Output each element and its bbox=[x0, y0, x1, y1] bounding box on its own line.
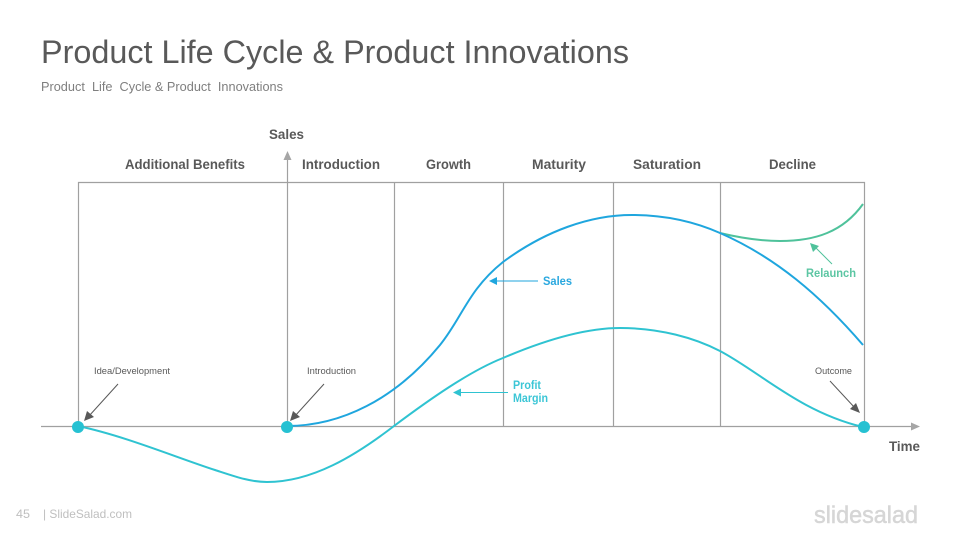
subtitle: Product Life Cycle & Product Innovations bbox=[41, 79, 283, 94]
marker: idea/development bbox=[72, 421, 84, 433]
stage headings: Decline bbox=[769, 156, 816, 172]
callout: outcome bbox=[815, 366, 860, 413]
stage headings: Growth bbox=[426, 156, 471, 172]
sales curve bbox=[287, 215, 863, 426]
label: profit margin: Margin bbox=[513, 391, 548, 405]
callout: introduction: Introduction bbox=[307, 366, 356, 376]
label: relaunch: Relaunch bbox=[806, 266, 856, 280]
stage headings bbox=[125, 156, 816, 172]
stage headings: Saturation bbox=[633, 156, 701, 172]
profit margin curve bbox=[78, 328, 863, 482]
label: profit margin: Profit bbox=[513, 378, 541, 392]
relaunch curve bbox=[720, 204, 863, 241]
callout: idea/development: Idea/Development bbox=[94, 366, 171, 376]
stage headings: Maturity bbox=[532, 156, 586, 172]
footer source: | SlideSalad.com bbox=[43, 507, 132, 521]
horizontal time axis bbox=[41, 422, 920, 430]
stage headings: Additional Benefits bbox=[125, 156, 245, 172]
marker: introduction bbox=[281, 421, 293, 433]
vertical sales axis bbox=[284, 151, 292, 427]
axis label: sales: Sales bbox=[269, 126, 304, 142]
stage grid bbox=[78, 182, 864, 427]
label: sales bbox=[489, 274, 572, 288]
stage headings: Introduction bbox=[302, 156, 380, 172]
label: relaunch bbox=[806, 243, 856, 280]
title: Product Life Cycle & Product Innovations bbox=[41, 34, 629, 70]
callout: idea/development bbox=[84, 366, 171, 421]
callout: outcome: Outcome bbox=[815, 366, 852, 376]
label: sales: Sales bbox=[543, 274, 572, 288]
callout: introduction bbox=[290, 366, 356, 421]
marker: outcome bbox=[858, 421, 870, 433]
label: profit margin bbox=[453, 378, 548, 405]
logo wordmark: slidesalad bbox=[814, 502, 918, 529]
axis label: time: Time bbox=[889, 438, 920, 454]
page number: 45 bbox=[16, 507, 30, 521]
